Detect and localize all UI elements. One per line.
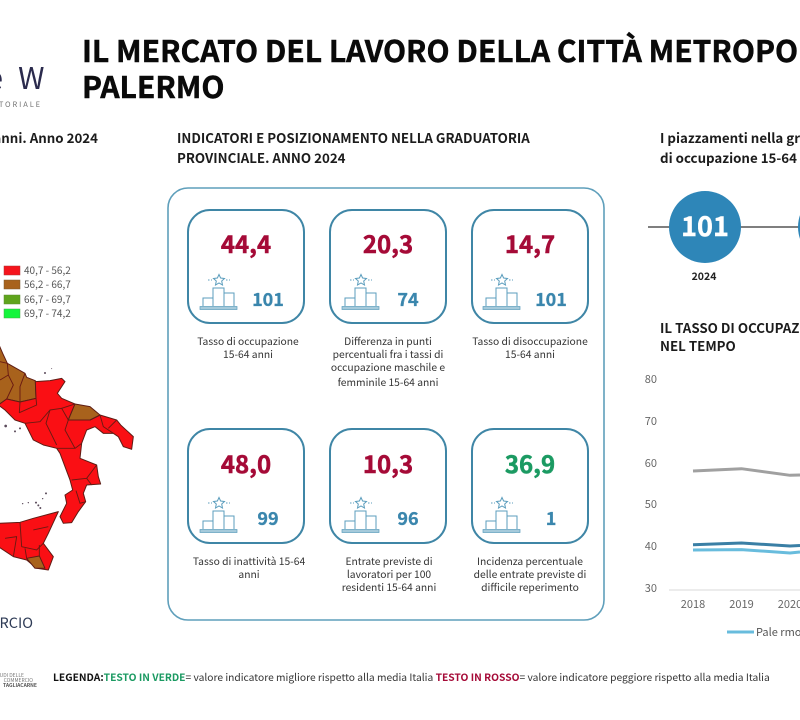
logo: top left bbox=[0, 54, 44, 110]
line chart: occupation rate bbox=[645, 371, 800, 640]
indicator card: differenza di genere: 20,3 bbox=[363, 225, 413, 260]
chart legend bbox=[727, 624, 800, 640]
x axis labels: 2019 bbox=[729, 596, 754, 612]
indicator card: tasso di disoccupazione: 14,7 bbox=[505, 225, 555, 260]
indicator card: tasso di occupazione: Tasso di occupazione bbox=[197, 333, 299, 348]
indicator card: difficile reperimento: difficile reperimento bbox=[481, 579, 579, 594]
indicator card: differenza di genere bbox=[330, 210, 446, 389]
indicator card: tasso di inattività: 48,0 bbox=[221, 445, 271, 480]
map region: brown Ragusa bbox=[27, 556, 45, 568]
indicator card: differenza di genere: 74 bbox=[397, 286, 419, 312]
indicator card: tasso di occupazione: 101 bbox=[252, 286, 284, 312]
indicator card: difficile reperimento: delle entrate previste di bbox=[474, 566, 587, 581]
indicator card: tasso di occupazione bbox=[188, 210, 304, 361]
map region: red mainland south bbox=[0, 378, 133, 523]
indicator card: differenza di genere: occupazione maschile e bbox=[331, 359, 445, 374]
heading: indicators bbox=[177, 128, 530, 167]
indicator card: entrate previste: 96 bbox=[397, 505, 419, 531]
icon: podium bbox=[342, 498, 379, 532]
icon: podium bbox=[200, 498, 237, 532]
y axis labels: 70 bbox=[645, 413, 657, 429]
legend text: LEGENDA:TESTO IN VERDE= valore indicatore migliore rispetto alla media Italia TESTO IN ROSSO= valore indicatore peggiore rispetto alla media Italia bbox=[53, 669, 770, 684]
indicator card: tasso di inattività: Tasso di inattività 15-64 bbox=[193, 553, 305, 568]
map islands bbox=[4, 368, 52, 509]
icon: podium bbox=[483, 274, 520, 310]
timeline: rankings: 2024 bbox=[692, 269, 716, 284]
indicator card: difficile reperimento: 36,9 bbox=[505, 445, 555, 480]
indicator card: entrate previste: Entrate previste di bbox=[345, 553, 433, 568]
map legend: 56,2 - 66,7 bbox=[24, 276, 71, 291]
heading: indicators: PROVINCIALE. ANNO 2024 bbox=[177, 148, 346, 167]
indicator card: entrate previste: residenti 15-64 anni bbox=[342, 579, 436, 594]
indicator card: difficile reperimento bbox=[472, 429, 588, 594]
map region: red Sicily bbox=[0, 512, 58, 570]
series: Sicilia bbox=[693, 543, 800, 546]
y axis labels: 40 bbox=[645, 538, 657, 554]
panel: indicators bbox=[168, 188, 604, 620]
indicator card: tasso di disoccupazione bbox=[472, 210, 588, 361]
heading: line chart bbox=[660, 318, 800, 355]
map: southern Italy bbox=[0, 343, 133, 570]
map legend: 69,7 - 74,2 bbox=[24, 305, 71, 320]
indicator card: difficile reperimento: 1 bbox=[546, 505, 556, 531]
map region: brown central provinces bbox=[0, 343, 36, 405]
map region: brown Bari bbox=[68, 404, 100, 420]
y axis labels: 30 bbox=[645, 580, 657, 596]
title bbox=[82, 27, 800, 107]
indicator card: entrate previste: 10,3 bbox=[363, 445, 413, 480]
x axis labels bbox=[681, 596, 800, 612]
indicator card: differenza di genere: percentuali fra i tassi di bbox=[333, 346, 444, 361]
y axis labels: 50 bbox=[645, 496, 657, 512]
indicator card: tasso di disoccupazione: Tasso di disoccupazione bbox=[472, 333, 588, 348]
logo: istituto tagliacarne: TAGLIACARNE bbox=[3, 682, 37, 689]
map legend bbox=[4, 262, 71, 320]
y axis labels bbox=[645, 371, 657, 596]
indicator card: tasso di inattività: anni bbox=[238, 566, 260, 581]
icon: podium bbox=[342, 274, 379, 310]
icon: podium bbox=[200, 274, 237, 310]
series: Italia bbox=[693, 469, 800, 475]
indicator card: tasso di occupazione: 15-64 anni bbox=[223, 346, 273, 361]
indicator card: tasso di inattività bbox=[188, 429, 305, 581]
indicator card: tasso di inattività: 99 bbox=[257, 505, 279, 531]
heading: indicators: INDICATORI E POSIZIONAMENTO NELLA GRADUATORIA bbox=[177, 128, 530, 147]
y axis labels: 60 bbox=[645, 455, 657, 471]
map legend: 40,7 - 56,2 bbox=[24, 262, 71, 277]
indicator card: entrate previste bbox=[330, 429, 446, 594]
indicator card: tasso di disoccupazione: 15-64 anni bbox=[505, 346, 555, 361]
logo: istituto tagliacarne: COMMERCIO bbox=[4, 677, 33, 684]
series: Palermo bbox=[693, 550, 800, 553]
logo: istituto tagliacarne bbox=[0, 672, 37, 689]
map province borders bbox=[0, 362, 117, 558]
indicator card: differenza di genere: Differenza in punti bbox=[344, 333, 432, 348]
indicator card: tasso di occupazione: 44,4 bbox=[221, 225, 271, 260]
heading: rankings over time bbox=[660, 128, 800, 167]
timeline: rankings bbox=[648, 191, 800, 284]
indicator card: differenza di genere: femminile 15-64 anni bbox=[338, 374, 439, 389]
y axis labels: 80 bbox=[645, 371, 657, 387]
icon: podium bbox=[483, 498, 520, 532]
logo: top left: W bbox=[18, 54, 44, 98]
x axis labels: 2018 bbox=[681, 596, 705, 612]
heading: line chart: NEL TEMPO bbox=[660, 336, 736, 355]
indicator card: difficile reperimento: Incidenza percentuale bbox=[477, 553, 583, 568]
map legend: 66,7 - 69,7 bbox=[24, 291, 71, 306]
indicator card: entrate previste: lavoratori per 100 bbox=[347, 566, 431, 581]
indicator card: tasso di disoccupazione: 101 bbox=[535, 286, 567, 312]
title: PALERMO bbox=[82, 63, 224, 107]
timeline: rankings: 101 bbox=[681, 205, 729, 244]
